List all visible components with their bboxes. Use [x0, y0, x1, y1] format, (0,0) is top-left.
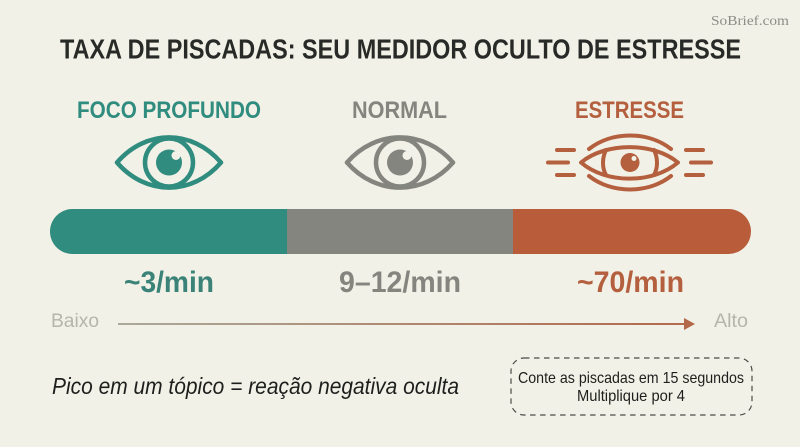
segmented bar: [50, 209, 751, 254]
icon: stressed eye: [548, 136, 711, 190]
column: estresse: [548, 97, 711, 299]
icon: calm eye: [117, 137, 221, 188]
value: estresse: ~70/min: [577, 266, 684, 299]
callout: count tip: Multiplique por 4: [577, 388, 685, 405]
watermark: SoBrief.com: [711, 14, 789, 29]
label: foco profundo: FOCO PROFUNDO: [77, 97, 261, 124]
bar segment: high: [513, 209, 751, 254]
label: estresse: ESTRESSE: [575, 97, 684, 124]
callout: count tip: Conte as piscadas em 15 segundos: [518, 370, 744, 387]
column: foco profundo: [77, 97, 261, 299]
scale low label: Baixo: [51, 311, 99, 332]
callout: count tip: [511, 358, 752, 415]
scale high label: Alto: [714, 311, 748, 332]
note: spike: Pico em um tópico = reação negativa oculta: [52, 373, 459, 399]
label: normal: NORMAL: [352, 97, 447, 124]
value: foco profundo: ~3/min: [124, 266, 214, 299]
bar segment: normal: [287, 209, 513, 254]
column: normal: [339, 97, 461, 299]
bar segment: low: [50, 209, 287, 254]
value: normal: 9–12/min: [339, 266, 461, 299]
icon: normal eye: [347, 137, 453, 188]
scale arrow: [118, 318, 695, 330]
